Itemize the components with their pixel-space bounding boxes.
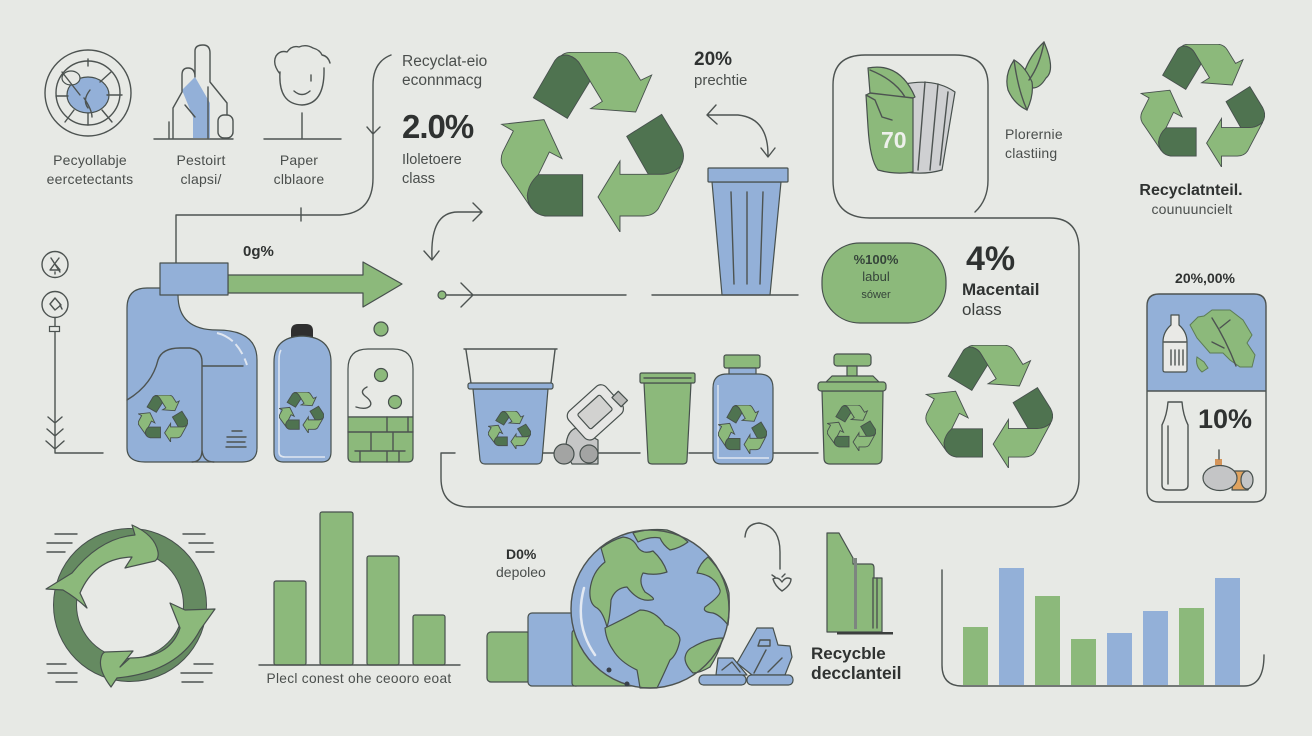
label: D0% — [496, 546, 546, 580]
mini recycle — [488, 411, 531, 449]
panel: right card: 20%,00% — [1175, 270, 1236, 286]
text block: economy 2.0% — [402, 53, 487, 187]
label: plastic leaves: clastiing — [1005, 145, 1057, 161]
green status pill: labul — [862, 269, 890, 284]
label: paper — [274, 152, 324, 187]
text block: economy 2.0%: econnmacg — [402, 72, 482, 89]
text block: economy 2.0%: Recyclat-eio — [402, 53, 487, 70]
icon: jar with bricks — [348, 322, 413, 462]
label: recyclable: eercetectants — [47, 171, 133, 187]
label: plastic — [176, 152, 226, 187]
text block: 4% material: olass — [962, 300, 1002, 319]
green flow arrow — [228, 262, 402, 307]
grey tank — [1203, 450, 1253, 490]
text block: 4% material — [962, 240, 1039, 319]
icon: blue trash bin — [708, 168, 788, 295]
orange cylinder — [1232, 471, 1250, 490]
top right recycle symbol — [1141, 44, 1265, 167]
text block: 4% material: 4% — [966, 240, 1015, 278]
icon: globe target — [45, 50, 131, 136]
text block: 4% material: Macentail — [962, 280, 1039, 299]
icon: large blue jug — [127, 288, 257, 462]
curved arrow to bin — [707, 105, 775, 157]
icon: green cup — [640, 373, 695, 464]
small branching arrow — [424, 203, 482, 260]
icon: circular arrows — [46, 525, 215, 687]
blocks behind globe — [487, 613, 652, 686]
label: 20% — [694, 49, 747, 89]
label: top right: Recyclatnteil. — [1139, 182, 1243, 199]
chart caption: Plecl conest ohe ceooro eoat — [267, 671, 451, 686]
text block: economy 2.0%: Iloletoere — [402, 152, 462, 168]
cup number: 70 — [881, 127, 907, 153]
medium recycle symbol — [926, 345, 1053, 468]
green tree — [1190, 310, 1255, 367]
icon: grey jerry can on wheels — [554, 382, 627, 464]
text block: economy 2.0%: class — [402, 171, 435, 187]
text block: economy 2.0%: 2.0% — [402, 108, 474, 145]
icon: green folder — [827, 533, 893, 634]
mini recycle — [827, 405, 876, 451]
bar chart: green — [259, 512, 460, 665]
label: recyclable: Pecyollabje — [53, 152, 127, 168]
mini recycle — [138, 395, 188, 442]
green status pill: sówer — [861, 289, 891, 301]
icon: blue rocks — [699, 628, 793, 685]
icon: green canister — [818, 354, 886, 464]
icon: blue bottle — [274, 324, 331, 462]
white bottle — [1163, 315, 1187, 372]
bottom arrow — [100, 603, 215, 687]
bar chart: blue and green — [942, 568, 1264, 686]
icon: paper person — [264, 46, 341, 139]
mini recycle — [718, 405, 767, 454]
icon: blue jar with recycle symbol — [713, 355, 773, 464]
label: top right — [1139, 182, 1243, 217]
label: recyclable material — [811, 644, 901, 683]
top arrow — [46, 525, 158, 608]
green status pill — [822, 243, 946, 323]
green status pill: %100% — [854, 252, 899, 267]
timeline at left — [42, 252, 103, 453]
label: recyclable material: Recycble — [811, 644, 886, 663]
label: 0g%: 0g% — [243, 243, 274, 260]
mini recycle — [279, 392, 324, 433]
panel: right card — [1147, 270, 1266, 502]
label: 20%: prechtie — [694, 72, 747, 89]
label: plastic: clapsi/ — [180, 171, 222, 187]
icon: blue recycle bucket — [464, 349, 557, 464]
flow line — [176, 55, 391, 263]
label: top right: counuuncielt — [1151, 201, 1233, 217]
label: plastic leaves — [1005, 126, 1063, 161]
icon: torn cup — [866, 67, 955, 173]
small heart with arrow — [745, 523, 791, 591]
label: D0%: D0% — [506, 546, 537, 562]
label: plastic: Pestoirt — [176, 152, 226, 168]
icon: globe — [571, 529, 729, 688]
icon: bottle — [154, 45, 233, 139]
label: paper: Paper — [280, 152, 318, 168]
icon: leaves — [1007, 42, 1051, 110]
panel: right card: 10% — [1198, 404, 1252, 434]
blue card section — [1147, 294, 1266, 391]
label: recyclable material: decclanteil — [811, 663, 901, 683]
panel outline frame — [441, 55, 1079, 507]
label: plastic leaves: Plorernie — [1005, 126, 1063, 142]
blue cap block — [160, 263, 228, 295]
label: recyclable — [47, 152, 133, 187]
divider lines with node — [438, 283, 798, 307]
large recycle symbol — [501, 52, 684, 232]
outline bottle — [1162, 402, 1188, 490]
container row baseline — [542, 452, 818, 454]
label: paper: clblaore — [274, 171, 324, 187]
label: D0%: depoleo — [496, 564, 546, 580]
label: 20%: 20% — [694, 49, 732, 70]
